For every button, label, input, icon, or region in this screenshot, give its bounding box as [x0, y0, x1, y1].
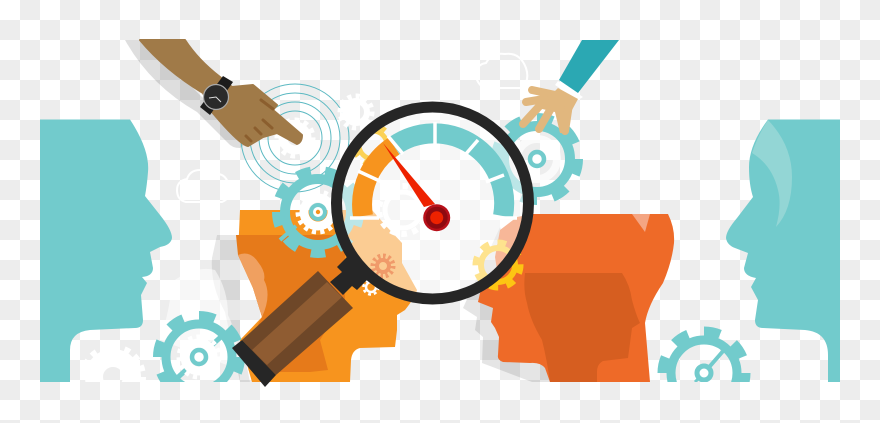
pale head tint: [238, 254, 268, 317]
white gear top: [340, 96, 372, 128]
watch strap: [200, 76, 233, 115]
gauge dial: [350, 122, 517, 276]
watch face: [204, 84, 228, 110]
lower right gauge gear: [658, 326, 750, 382]
gauge needle: [383, 143, 435, 207]
left teal face silhouette: [40, 120, 172, 382]
pink gear: [373, 256, 393, 276]
lower left white gear: [85, 346, 146, 382]
faded white gear: [379, 186, 427, 234]
inner white gear: [298, 192, 338, 232]
right teal face silhouette: [726, 120, 840, 382]
cuff: [555, 81, 583, 100]
magnifier lens glass: [342, 112, 524, 294]
dark inner head: [524, 273, 640, 382]
small white gear on left head: [364, 280, 378, 294]
handle end cap: [232, 340, 276, 387]
finger creases: [246, 100, 273, 141]
magnifier handle: [232, 271, 353, 387]
faded yellow gear: [354, 126, 392, 164]
right hand with sleeve: [523, 40, 619, 133]
right cloud outline: [476, 54, 527, 88]
yellow gear: [476, 242, 520, 288]
forehead highlight: [632, 214, 650, 232]
teal gear behind right hand: [497, 119, 577, 199]
left cloud outline: [177, 170, 230, 202]
left orange head: [236, 210, 417, 382]
face highlight: [752, 120, 792, 227]
orange gauge arc: [362, 146, 394, 216]
dark inner head: [236, 235, 345, 372]
sleeve: [559, 40, 619, 93]
shadow head behind left orange head: [160, 235, 250, 382]
teal gauge arc: [394, 133, 504, 216]
magnifier ring: [336, 107, 528, 299]
teal gear over left head: [278, 172, 358, 252]
needle hub: [423, 204, 450, 231]
lower left teal gear: [159, 317, 239, 397]
palm: [538, 88, 578, 133]
magnifier connector: [330, 257, 367, 295]
white gear at ring centre: [277, 120, 313, 156]
shadow head behind right orange head: [463, 227, 552, 382]
watch hands: [209, 97, 221, 102]
fingers: [523, 90, 569, 131]
left pointing hand with watch: [140, 40, 302, 146]
gauge dividers: [350, 122, 517, 218]
concentric target rings: [241, 84, 349, 192]
left arm shadow: [125, 40, 258, 148]
right orange head: [478, 214, 674, 382]
handle centre band: [252, 282, 342, 365]
